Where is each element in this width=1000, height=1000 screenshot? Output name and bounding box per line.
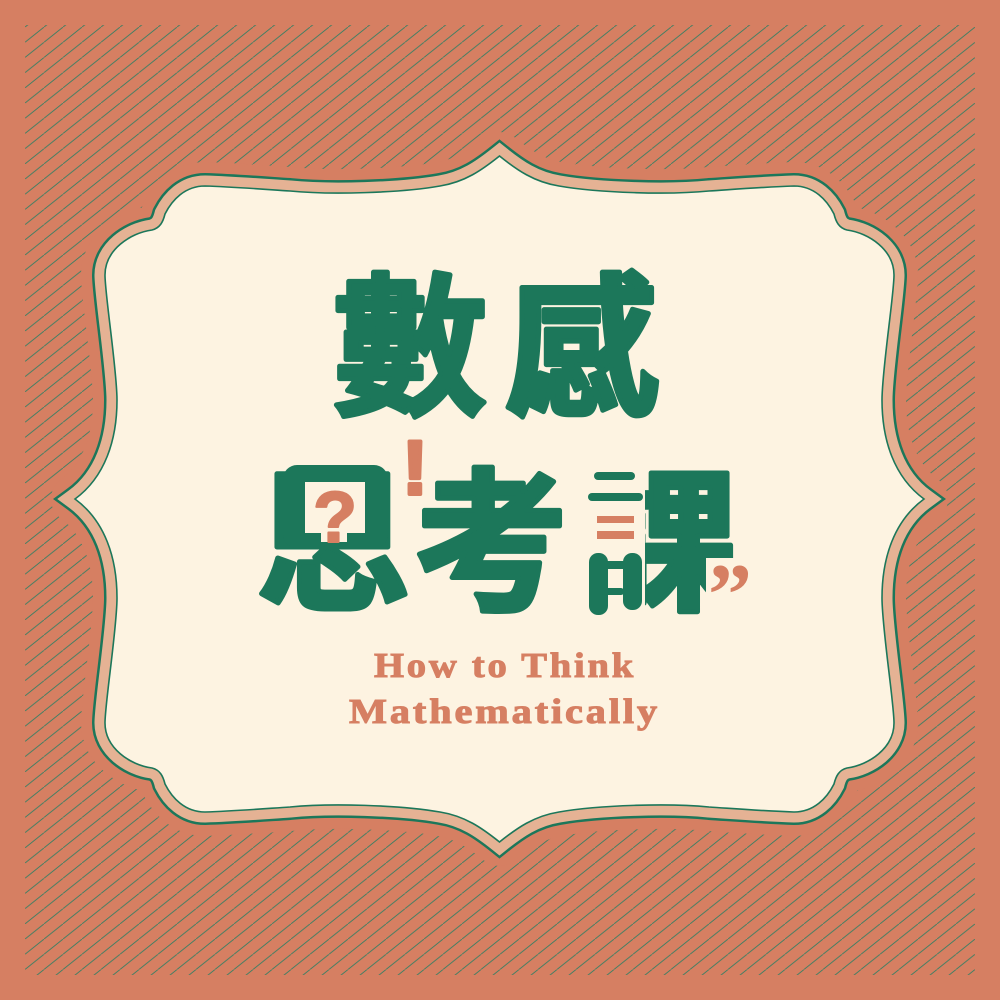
ornate frame <box>75 156 924 842</box>
salmon bars in 課 <box>597 516 634 539</box>
question mark: ? <box>313 478 357 558</box>
exclamation mark: ! <box>402 426 428 511</box>
title: 數感: 感 <box>505 264 659 436</box>
title: 思考課: 思 <box>256 459 410 631</box>
title: 數感 <box>333 264 659 436</box>
subtitle: How to Think <box>374 646 636 685</box>
subtitle: Mathematically <box>349 692 660 731</box>
closing quote mark: ” <box>708 547 752 644</box>
title: 思考課: 考 <box>414 459 568 631</box>
title: 思考課 <box>256 458 750 631</box>
subtitle <box>349 646 660 731</box>
title: 思考課: 課 <box>584 459 738 631</box>
title: 數感: 數 <box>333 264 487 436</box>
